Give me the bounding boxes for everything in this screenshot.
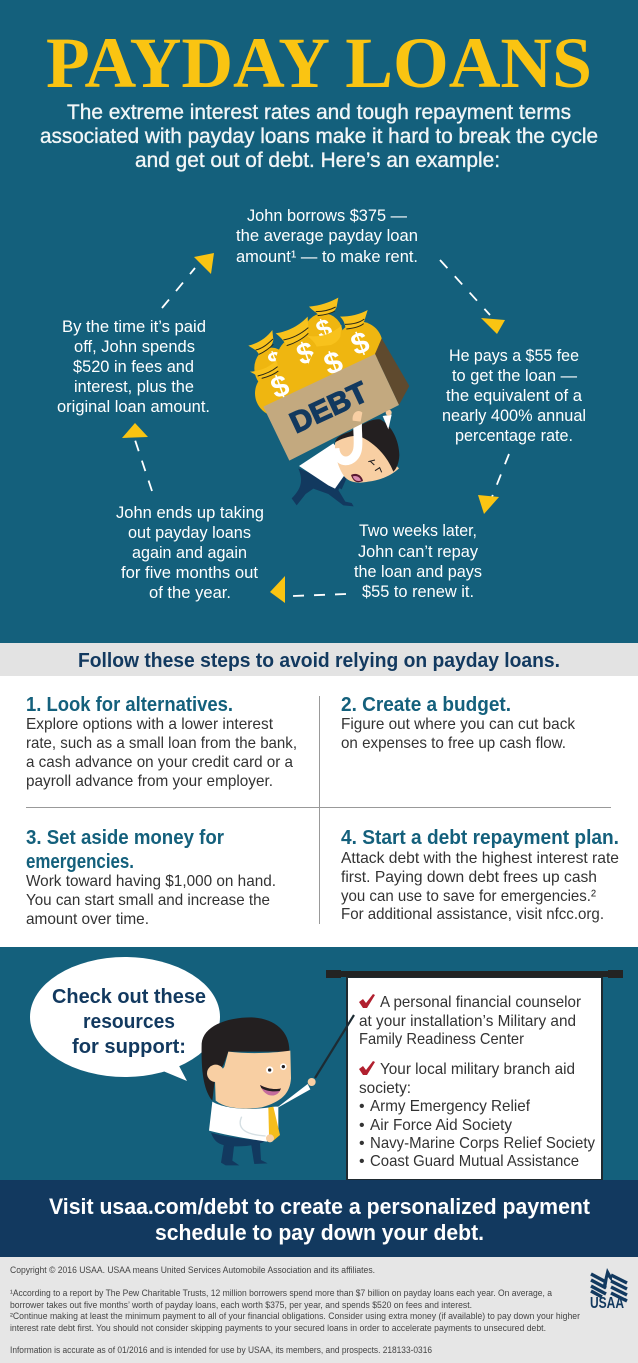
step 3 <box>26 827 276 928</box>
cycle step: total paid: interest, plus the <box>74 378 194 396</box>
money bags: $ <box>320 344 347 382</box>
icon: USAA logo: ® <box>624 1297 627 1302</box>
step 3: 3. Set aside money for <box>26 827 224 849</box>
subtitle: associated with payday loans make it hard to break the cycle <box>40 125 598 148</box>
cycle step: John borrows: John borrows $375 — <box>247 207 407 225</box>
debt box <box>263 338 409 461</box>
debt label: DEBT <box>285 375 373 440</box>
display board: A personal financial counselor <box>380 994 582 1011</box>
step 1: rate, such as a small loan from the bank, <box>26 735 297 752</box>
illustration: man carrying debt box <box>248 298 409 506</box>
display board: Your local military branch aid <box>380 1061 575 1078</box>
call to action band: Visit usaa.com/debt to create a personalized payment <box>49 1194 591 1219</box>
money bags: $ <box>264 346 286 376</box>
steps heading band <box>0 643 638 676</box>
icon: check mark <box>359 994 375 1008</box>
step 4: first. Paying down debt frees up cash <box>341 869 597 886</box>
steps heading band: Follow these steps to avoid relying on payday loans. <box>78 650 560 672</box>
speech bubble <box>30 957 220 1081</box>
step 3: You can start small and increase the <box>26 892 270 909</box>
cycle step: again: again and again <box>132 544 247 562</box>
step 1 <box>26 694 297 790</box>
title: PAYDAY LOANS <box>46 23 592 103</box>
cycle step: John borrows <box>236 207 418 266</box>
step 2 <box>341 694 576 752</box>
cycle step: total paid <box>57 318 210 416</box>
step 1: 1. Look for alternatives. <box>26 694 233 716</box>
speech bubble: Check out these <box>52 986 206 1008</box>
icon: USAA logo <box>590 1268 627 1312</box>
step 4 <box>341 827 619 923</box>
cycle step: renew <box>354 522 482 601</box>
footer notes: Information is accurate as of 01/2016 and is intended for use by USAA, its members, and prospects. 218133-0316 <box>10 1345 432 1355</box>
call to action band <box>0 1180 638 1257</box>
display board: • <box>359 1098 365 1115</box>
cycle step: fee: He pays a $55 fee <box>449 347 579 365</box>
cycle step: again: of the year. <box>149 584 231 602</box>
cycle step: fee: to get the loan — <box>452 367 577 385</box>
icon: USAA logo: USAA <box>590 1295 624 1312</box>
subtitle: and get out of debt. Here’s an example: <box>135 149 500 172</box>
step 2: 2. Create a budget. <box>341 694 511 716</box>
panel: payday loan cycle <box>0 0 638 643</box>
footer notes <box>10 1265 580 1355</box>
cycle step: fee <box>442 347 586 445</box>
subtitle: The extreme interest rates and tough repayment terms <box>67 101 571 124</box>
speech bubble: for support: <box>72 1036 186 1058</box>
money bags: $ <box>347 325 374 362</box>
cycle step: total paid: $520 in fees and <box>73 358 194 376</box>
display board: society: <box>359 1080 411 1097</box>
cycle step: fee: percentage rate. <box>455 427 573 445</box>
cycle step: total paid: off, John spends <box>74 338 195 356</box>
footer notes: borrower takes out five months’ worth of payday loans, each worth $375, per year, and spends $520 on fees and interest. <box>10 1300 472 1310</box>
money bags: $ <box>312 312 336 345</box>
display board: at your installation’s Military and <box>359 1013 576 1030</box>
panel: steps <box>0 676 638 947</box>
display board: • <box>359 1153 365 1170</box>
display board: Air Force Aid Society <box>370 1117 512 1134</box>
cycle step: again: John ends up taking <box>116 504 264 522</box>
icon: check mark <box>359 1061 375 1075</box>
cycle step: total paid: original loan amount. <box>57 398 210 416</box>
step 3: amount over time. <box>26 911 149 928</box>
step 3: emergencies. <box>26 851 134 873</box>
speech bubble: resources <box>83 1011 175 1033</box>
step 1: Explore options with a lower interest <box>26 716 274 733</box>
display board: • <box>359 1135 365 1152</box>
call to action band: schedule to pay down your debt. <box>155 1220 484 1245</box>
step 4: you can use to save for emergencies.² <box>341 888 597 905</box>
step 4: Attack debt with the highest interest rate <box>341 850 619 867</box>
cycle step: John borrows: amount¹ — to make rent. <box>236 248 418 266</box>
cycle step: again: for five months out <box>121 564 258 582</box>
money bags: $ <box>292 335 320 372</box>
cycle step: again: out payday loans <box>128 524 251 542</box>
cycle step: again <box>116 504 264 602</box>
cycle step: renew: Two weeks later, <box>359 522 477 540</box>
step 4: 4. Start a debt repayment plan. <box>341 827 619 849</box>
arrow: top right <box>440 260 505 334</box>
money bags <box>248 298 383 417</box>
panel: resources <box>0 947 638 1180</box>
man <box>292 410 399 506</box>
display board: Army Emergency Relief <box>370 1098 531 1115</box>
footer notes: ¹According to a report by The Pew Charitable Trusts, 12 million borrowers spend more than $7 billion on payday loans each year. On average, a <box>10 1288 552 1298</box>
step 3: Work toward having $1,000 on hand. <box>26 873 276 890</box>
subtitle <box>40 101 598 172</box>
display board: Coast Guard Mutual Assistance <box>370 1153 579 1170</box>
display board: Navy-Marine Corps Relief Society <box>370 1135 595 1152</box>
cycle step: renew: the loan and pays <box>354 563 482 581</box>
cycle step: total paid: By the time it’s paid <box>62 318 206 336</box>
display board <box>326 970 623 1180</box>
illustration: presenter <box>202 1017 316 1165</box>
cycle step: fee: nearly 400% annual <box>442 407 586 425</box>
display board: • <box>359 1117 365 1134</box>
display board: Family Readiness Center <box>359 1031 525 1048</box>
cycle step: John borrows: the average payday loan <box>236 227 418 245</box>
panel: footer <box>0 1257 638 1363</box>
footer notes: ²Continue making at least the minimum payment to all of your financial obligations. Consider using extra money (if available) to pay down your higher <box>10 1311 580 1321</box>
arrow: top left <box>162 253 214 308</box>
pointer <box>315 1015 354 1078</box>
footer notes: interest rate debt first. You should not consider skipping payments to your secured loans in order to accelerate payments to unsecured debt. <box>10 1323 546 1333</box>
arrow: left <box>122 423 152 491</box>
cycle step: renew: $55 to renew it. <box>362 583 474 601</box>
step 1: a cash advance on your credit card or a <box>26 754 293 771</box>
footer notes: Copyright © 2016 USAA. USAA means United Services Automobile Association and its affiliates. <box>10 1265 375 1275</box>
step 2: on expenses to free up cash flow. <box>341 735 566 752</box>
cycle step: renew: John can’t repay <box>358 543 479 561</box>
money bags: $ <box>267 369 294 405</box>
arrow: bottom <box>270 576 346 603</box>
step 4: For additional assistance, visit nfcc.org. <box>341 906 604 923</box>
arrow: right <box>478 454 509 514</box>
step 1: payroll advance from your employer. <box>26 773 273 790</box>
step 2: Figure out where you can cut back <box>341 716 576 733</box>
cycle step: fee: the equivalent of a <box>446 387 583 405</box>
